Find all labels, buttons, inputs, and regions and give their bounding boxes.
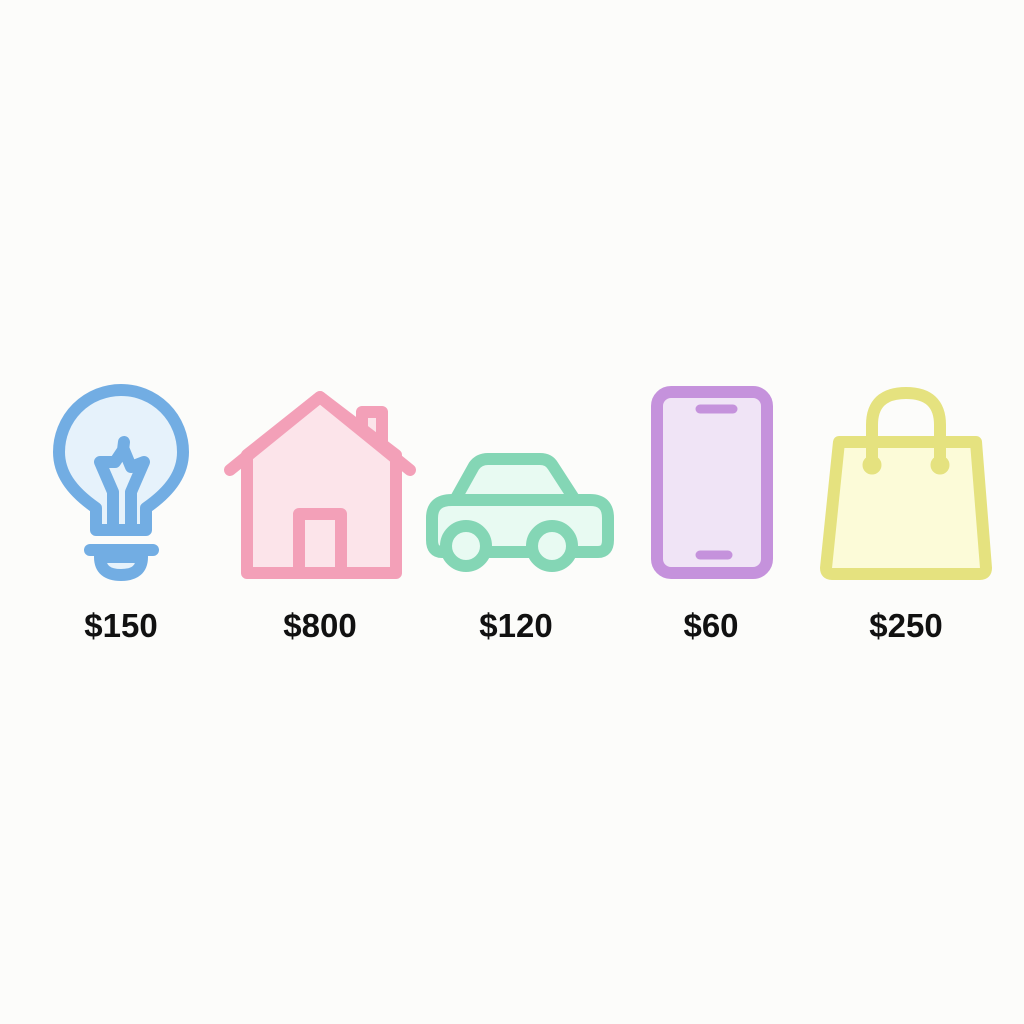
label: $250: $250: [869, 607, 943, 644]
label: $120: $120: [479, 607, 553, 644]
icon: phone: [657, 392, 767, 573]
icon: light bulb: [59, 390, 183, 575]
label: $800: $800: [283, 607, 357, 644]
icon: car: [432, 459, 608, 566]
icon: shopping bag: [826, 393, 986, 574]
label: $150: $150: [84, 607, 158, 644]
icon: house: [230, 397, 410, 573]
label: $60: $60: [683, 607, 739, 644]
